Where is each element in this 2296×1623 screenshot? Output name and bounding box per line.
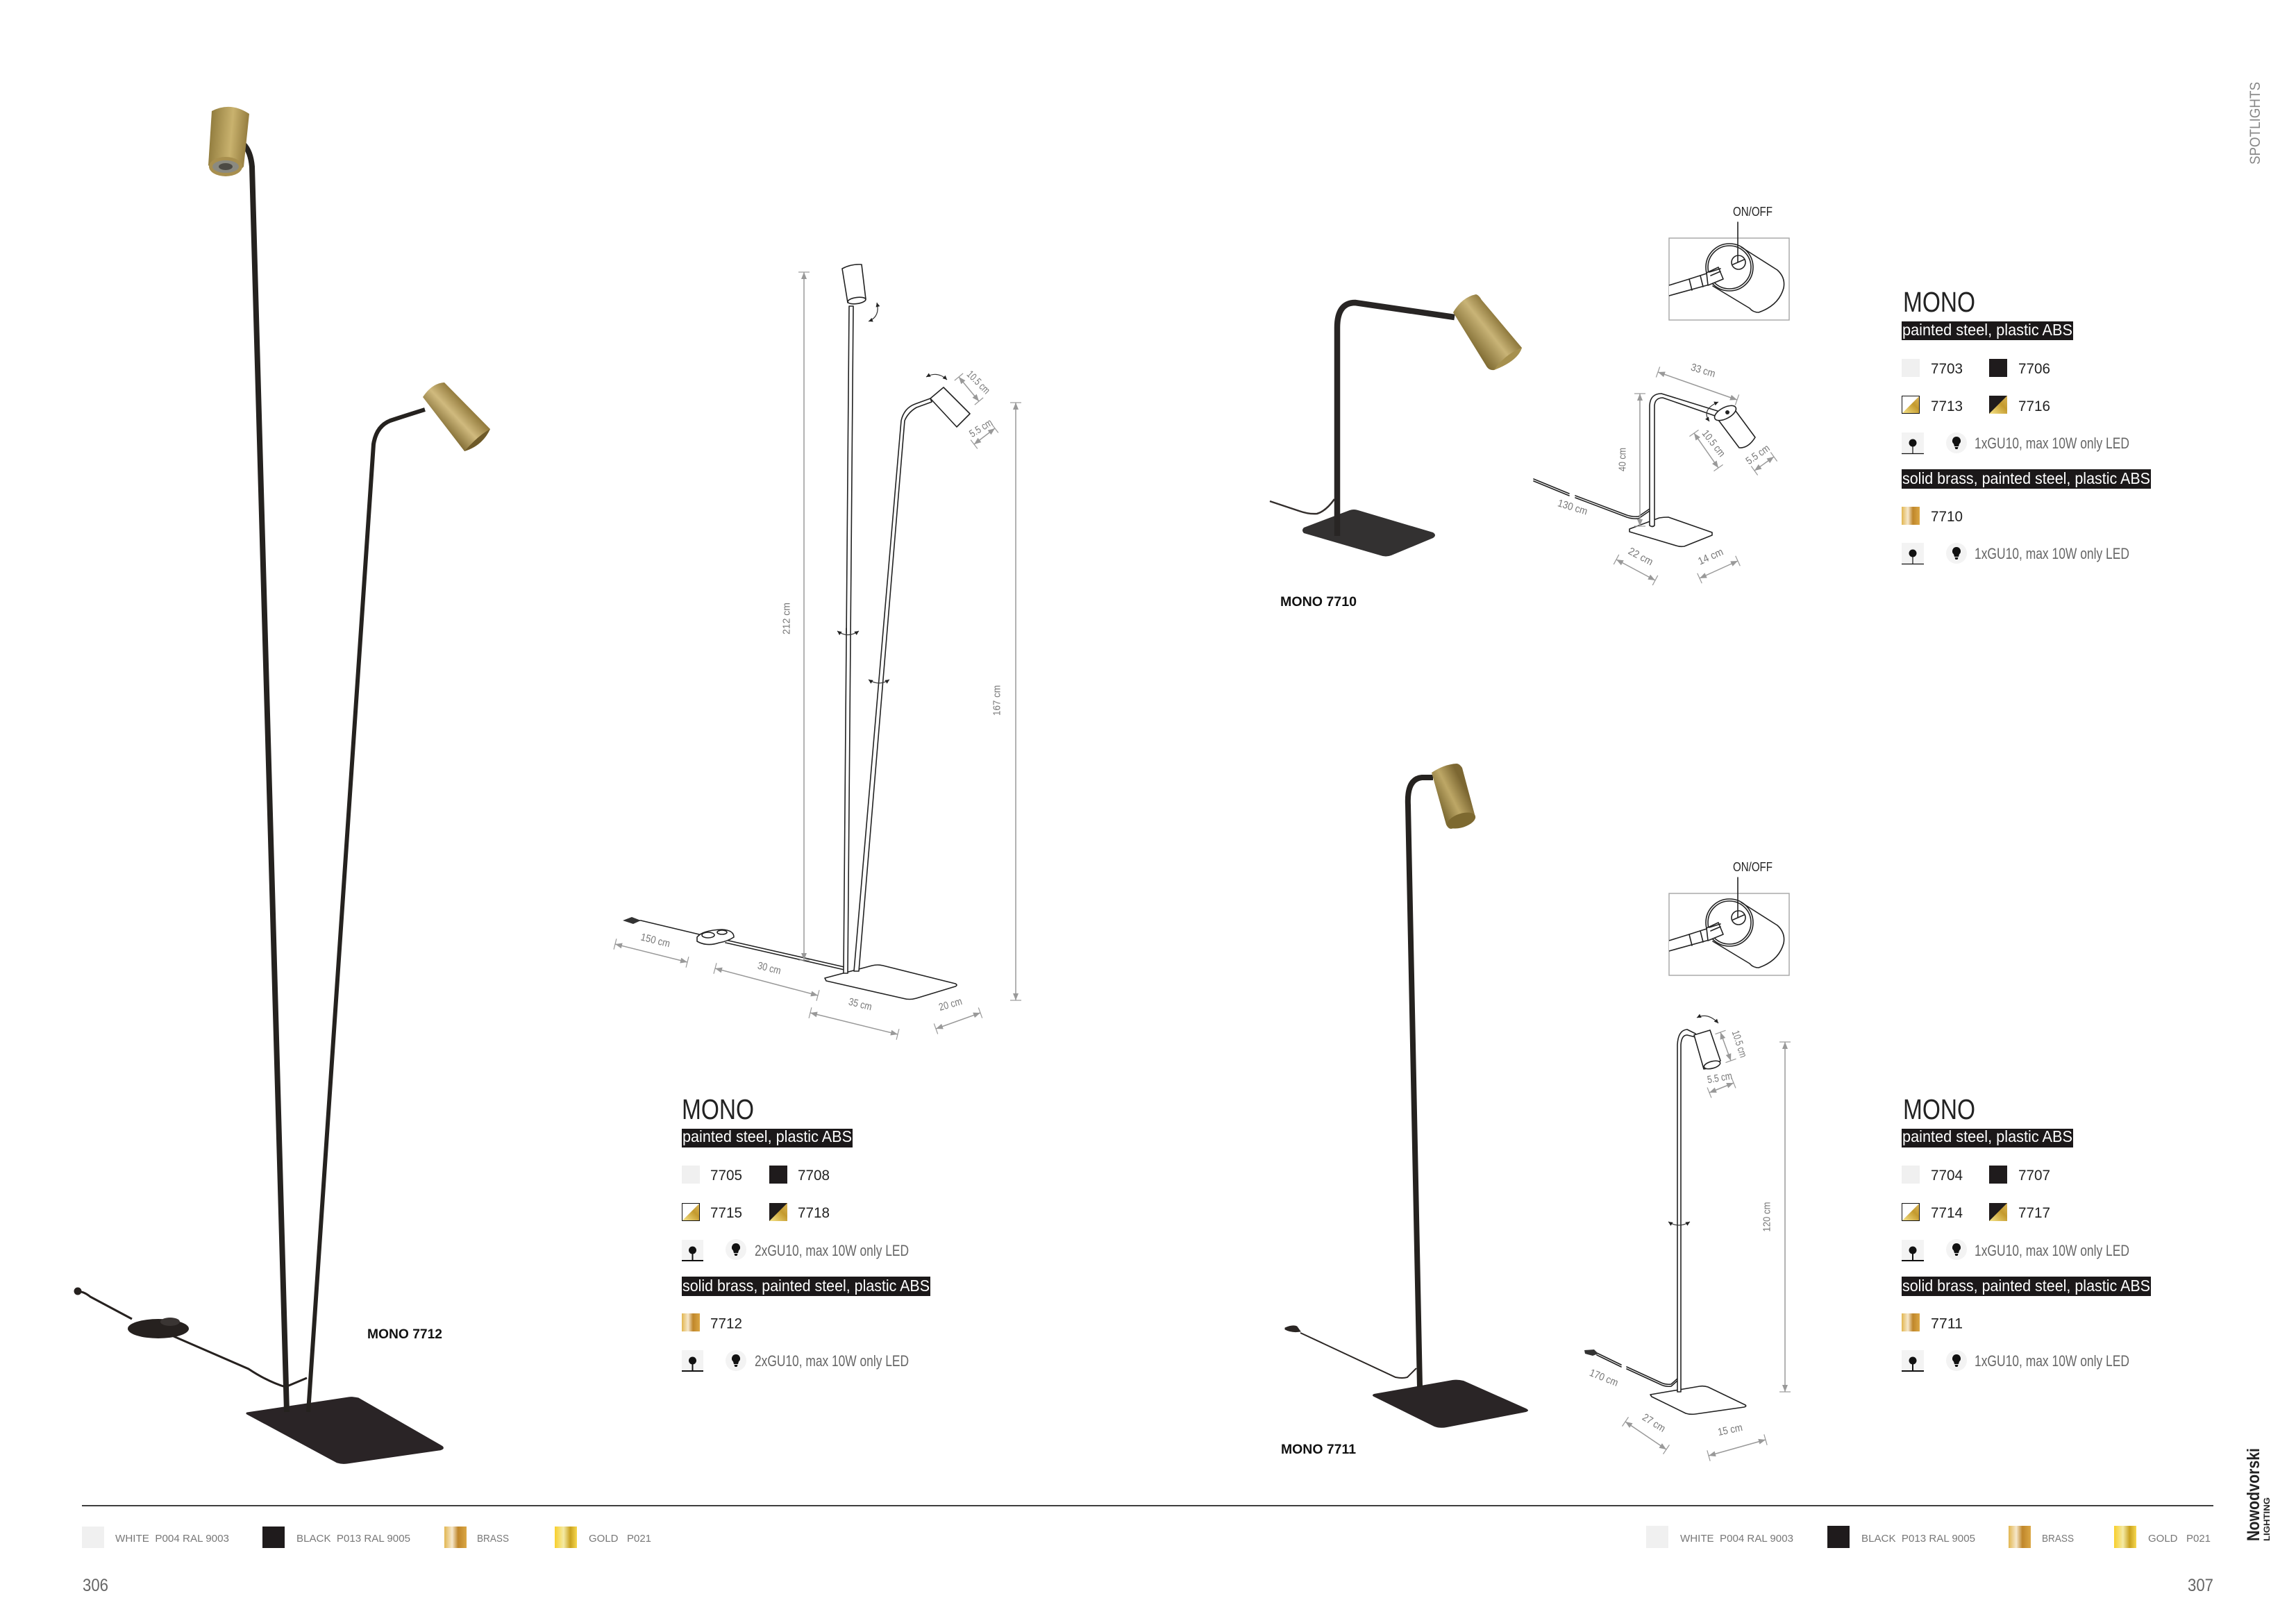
swatch row 2: 7713 <box>1931 398 1963 414</box>
icon: bulb <box>726 1239 746 1260</box>
icon: floor mount <box>1902 432 1924 454</box>
swatch row 2 <box>1902 1203 2050 1221</box>
rotation arrow <box>1707 402 1718 421</box>
swatch row 1 <box>682 1166 830 1184</box>
black swatch <box>262 1527 410 1548</box>
swatch row 1: 7705 <box>710 1168 742 1184</box>
inset: on/off switch detail <box>1669 205 1789 320</box>
pole and arm <box>1337 303 1455 536</box>
swatch row 2 <box>1902 396 2050 414</box>
material tag 2: solid brass, painted steel, plastic ABS <box>682 1277 930 1295</box>
rotation arrows <box>837 303 947 683</box>
icon: bulb <box>1946 543 1967 564</box>
caption: ON/OFF <box>1733 860 1773 874</box>
dimension: 167 cm: 167 cm <box>991 685 1003 716</box>
swatch row 1: 7708 <box>798 1168 830 1184</box>
leader <box>1737 222 1738 262</box>
brass head <box>1453 294 1522 370</box>
technical drawing: twin floor lamp <box>615 264 1016 1034</box>
arm <box>1669 267 1723 296</box>
icon: floor mount <box>682 1240 703 1261</box>
dimension: 5.5 cm: 5.5 cm <box>1744 442 1772 467</box>
cable with dimmer <box>74 1288 307 1387</box>
cable and dimmer <box>623 917 844 970</box>
panel: spec block floor lamp <box>1902 1093 2151 1372</box>
white swatch <box>1646 1526 1793 1548</box>
swatch row 1: 7704 <box>1931 1168 1963 1184</box>
swatch brass: 7711 <box>1931 1316 1963 1331</box>
dimension: 5.5 cm <box>1707 1070 1734 1093</box>
swatch brass <box>1902 1313 1963 1331</box>
swatch row 1: 7703 <box>1931 361 1963 377</box>
icon: bulb <box>1946 1239 1967 1260</box>
legend: right page <box>1646 1526 2211 1548</box>
icon: floor mount <box>1902 1350 1924 1372</box>
gold swatch <box>555 1527 651 1548</box>
page number 306: 306 <box>83 1576 108 1595</box>
dimension: 33 cm: 33 cm <box>1689 362 1717 380</box>
swatch row 2: 7717 <box>2018 1205 2050 1221</box>
technical drawing: table lamp <box>1534 362 1774 580</box>
base outline <box>1629 517 1712 546</box>
dimension: 120 cm: 120 cm <box>1761 1202 1773 1231</box>
material tag 1: painted steel, plastic ABS <box>1902 321 2072 339</box>
cable <box>1285 1326 1416 1378</box>
lamp photo: twin floor lamp 7712 <box>74 107 490 1463</box>
base plate <box>1373 1380 1528 1428</box>
dimension: 10.5 cm: 10.5 cm <box>964 369 992 396</box>
swatch brass <box>1902 507 1963 525</box>
lamp spec: 2xGU10, max 10W only LED <box>755 1242 909 1259</box>
lamp photo: table lamp 7710 <box>1270 294 1522 557</box>
lamp spec: 1xGU10, max 10W only LED <box>1975 1242 2129 1259</box>
brass swatch <box>444 1527 509 1548</box>
swatch row 2: 7714 <box>1931 1205 1963 1221</box>
dimension: 35 cm <box>810 996 898 1034</box>
icon: bulb <box>1946 432 1967 453</box>
cable <box>1270 499 1334 514</box>
brand logo <box>2244 1448 2272 1541</box>
dimension: 212 cm: 212 cm <box>780 603 793 634</box>
dimension: 14 cm <box>1696 546 1738 578</box>
lamp spec: 2xGU10, max 10W only LED <box>755 1352 909 1370</box>
swatch brass: 7710 <box>1931 509 1963 525</box>
short pole and arm <box>308 410 425 1412</box>
icon: floor mount <box>1902 543 1924 564</box>
dimension: 27 cm <box>1625 1411 1668 1449</box>
cable <box>1534 479 1650 519</box>
dimension: 10.5 cm <box>1720 1029 1749 1061</box>
base outline <box>825 965 957 1000</box>
brass swatch <box>2009 1526 2074 1548</box>
dimension: 27 cm: 27 cm <box>1640 1411 1668 1435</box>
dimension: 150 cm <box>615 932 687 962</box>
material tag 1: painted steel, plastic ABS <box>682 1127 852 1145</box>
lamp photo: floor lamp 7711 <box>1285 764 1528 1428</box>
swatch brass: 7712 <box>710 1316 742 1331</box>
panel: spec block floor lamp twin <box>682 1093 930 1372</box>
lamp spec: 1xGU10, max 10W only LED <box>1975 435 2129 452</box>
heading: MONO <box>1903 1093 1975 1125</box>
gold swatch: GOLD P021 <box>589 1533 651 1545</box>
brass head side <box>423 382 490 451</box>
tagline: LIGHTING <box>2262 1497 2272 1541</box>
dimension: 10.5 cm <box>959 369 992 401</box>
gold swatch: GOLD P021 <box>2148 1533 2211 1545</box>
switch head <box>1706 244 1784 312</box>
icon: bulb <box>1946 1350 1967 1371</box>
white swatch: WHITE P004 RAL 9003 <box>1680 1533 1793 1545</box>
dimension: 5.5 cm: 5.5 cm <box>1707 1070 1733 1086</box>
material tag 2: solid brass, painted steel, plastic ABS <box>1902 1277 2150 1295</box>
legend: left page <box>82 1527 651 1548</box>
section label: SPOTLIGHTS <box>2247 82 2263 165</box>
material tag 2: solid brass, painted steel, plastic ABS <box>1902 469 2150 487</box>
swatch row 2: 7718 <box>798 1205 830 1221</box>
label: MONO 7712 <box>367 1327 442 1342</box>
lamp spec: 1xGU10, max 10W only LED <box>1975 1352 2129 1370</box>
dimension: 10.5 cm: 10.5 cm <box>1700 428 1727 460</box>
cable <box>1584 1349 1677 1386</box>
page number 307: 307 <box>2188 1576 2213 1595</box>
black swatch: BLACK P013 RAL 9005 <box>296 1533 410 1545</box>
icon: bulb <box>726 1350 746 1371</box>
swatch row 2: 7715 <box>710 1205 742 1221</box>
pole tall <box>844 306 853 973</box>
base plate <box>247 1398 442 1463</box>
base plate <box>1302 510 1435 557</box>
head tall <box>842 264 866 305</box>
rotation arrows <box>1668 1016 1718 1225</box>
dimension: 10.5 cm <box>1694 428 1727 468</box>
label: MONO 7711 <box>1281 1443 1356 1457</box>
icon: floor mount <box>1902 1240 1924 1261</box>
head <box>1694 1030 1721 1070</box>
dimension: 5.5 cm: 5.5 cm <box>967 417 995 440</box>
brass swatch: BRASS <box>477 1533 509 1545</box>
dimension: 14 cm: 14 cm <box>1696 546 1725 567</box>
white swatch: WHITE P004 RAL 9003 <box>115 1533 229 1545</box>
black swatch <box>1827 1526 1975 1548</box>
head side <box>930 387 970 427</box>
white swatch <box>82 1527 229 1548</box>
dimension: 30 cm: 30 cm <box>756 960 782 977</box>
dimension: 22 cm <box>1616 546 1655 580</box>
caption: ON/OFF <box>1733 205 1773 219</box>
gold swatch <box>2114 1526 2211 1548</box>
brass swatch: BRASS <box>2042 1533 2074 1545</box>
dimension: 15 cm: 15 cm <box>1717 1422 1743 1438</box>
inset: on/off switch detail <box>1669 860 1789 975</box>
dimension: 10.5 cm: 10.5 cm <box>1729 1029 1749 1059</box>
brass head top <box>208 107 249 176</box>
technical drawing: floor lamp <box>1584 1016 1785 1456</box>
dimension: 35 cm: 35 cm <box>847 996 873 1013</box>
tall pole <box>244 144 287 1412</box>
pole short with arm <box>854 398 932 971</box>
swatch row 1: 7707 <box>2018 1168 2050 1184</box>
panel: spec block table lamp <box>1902 286 2151 564</box>
frame <box>1669 893 1789 975</box>
brass head <box>1432 764 1477 832</box>
switch head <box>1706 899 1784 968</box>
head <box>1712 403 1755 448</box>
pole and arm <box>1677 1029 1695 1392</box>
dimension: 30 cm <box>715 960 818 995</box>
dimension: 40 cm: 40 cm <box>1616 448 1629 471</box>
swatch row 1: 7706 <box>2018 361 2050 377</box>
base outline <box>1650 1386 1746 1414</box>
lamp spec: 1xGU10, max 10W only LED <box>1975 545 2129 562</box>
dimension: 22 cm: 22 cm <box>1626 546 1655 568</box>
swatch row 2: 7716 <box>2018 398 2050 414</box>
frame <box>1669 238 1789 320</box>
dimension: 150 cm: 150 cm <box>639 932 671 950</box>
icon: floor mount <box>682 1350 703 1372</box>
dimension: 5.5 cm <box>967 417 995 444</box>
swatch brass <box>682 1313 742 1331</box>
pole and arm <box>1408 777 1433 1387</box>
pole and arm <box>1650 394 1720 526</box>
wordmark: Nowodvorski <box>2244 1448 2263 1541</box>
dimension: 15 cm <box>1709 1422 1766 1456</box>
black swatch: BLACK P013 RAL 9005 <box>1861 1533 1975 1545</box>
dimension: 20 cm <box>936 995 980 1029</box>
label: MONO 7710 <box>1280 595 1357 609</box>
dimension: 33 cm <box>1658 362 1737 400</box>
dimension: 20 cm: 20 cm <box>937 995 964 1014</box>
swatch row 2 <box>682 1203 830 1221</box>
swatch row 1 <box>1902 359 2050 377</box>
heading: MONO <box>682 1093 754 1125</box>
arm <box>1669 923 1723 951</box>
leader <box>1737 877 1738 918</box>
dimension: 170 cm: 170 cm <box>1588 1367 1620 1389</box>
dimension: 130 cm: 130 cm <box>1556 497 1589 518</box>
material tag 1: painted steel, plastic ABS <box>1902 1127 2072 1145</box>
heading: MONO <box>1903 286 1975 318</box>
swatch row 1 <box>1902 1166 2050 1184</box>
